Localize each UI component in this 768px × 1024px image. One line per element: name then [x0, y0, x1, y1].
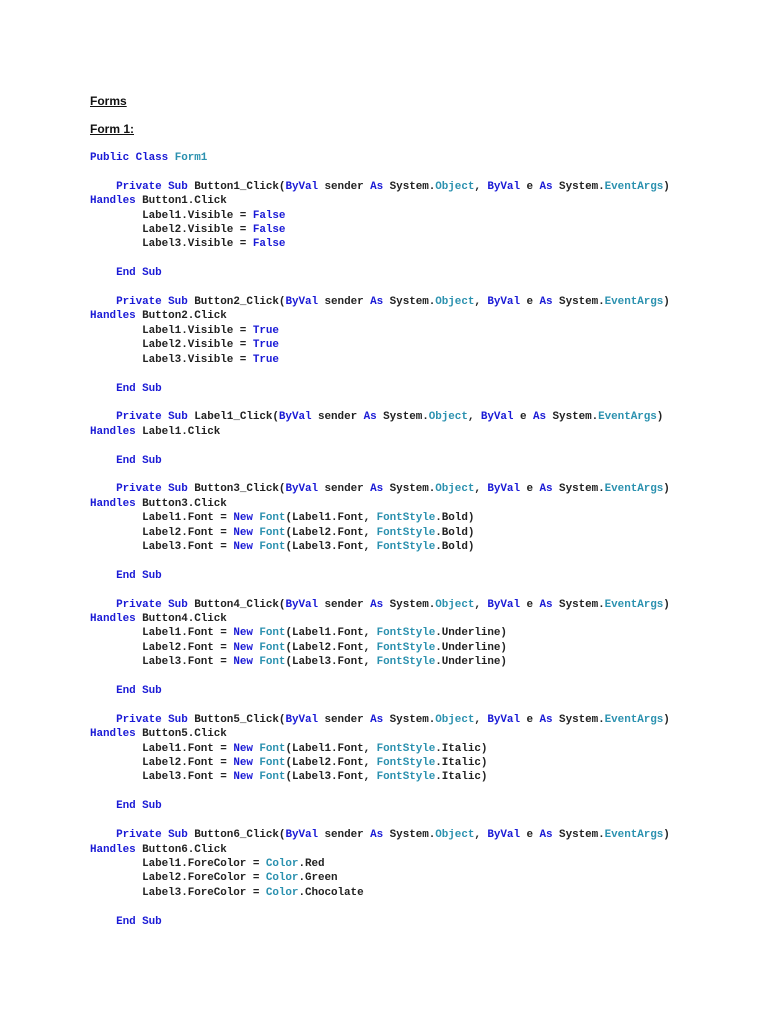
heading: Form 1: Form 1: [90, 122, 134, 136]
heading: Forms: Forms [90, 94, 127, 108]
code block: Public Class Form1 Private Sub Button1_Click(ByVal sender As System.Object, ByVal e As System.EventArgs) Handles Button1.Click Label1.Visible = False Label2.Visible = False Label3.Visible = False End Sub Private Sub Button2_Click(ByVal sender As System.Object, ByVal e As System.EventArgs) Handles Button2.Click Label1.Visible = True Label2.Visible = True Label3.Visible = True End Sub Private Sub Label1_Click(ByVal sender As System.Object, ByVal e As System.EventArgs) Handles Label1.Click End Sub Private Sub Button3_Click(ByVal sender As System.Object, ByVal e As System.EventArgs) Handles Button3.Click Label1.Font = New Font(Label1.Font, FontStyle.Bold) Label2.Font = New Font(Label2.Font, FontStyle.Bold) Label3.Font = New Font(Label3.Font, FontStyle.Bold) End Sub Private Sub Button4_Click(ByVal sender As System.Object, ByVal e As System.EventArgs) Handles Button4.Click Label1.Font = New Font(Label1.Font, FontStyle.Underline) Label2.Font = New Font(Label2.Font, FontStyle.Underline) Label3.Font = New Font(Label3.Font, FontStyle.Underline) End Sub Private Sub Button5_Click(ByVal sender As System.Object, ByVal e As System.EventArgs) Handles Button5.Click Label1.Font = New Font(Label1.Font, FontStyle.Italic) Label2.Font = New Font(Label2.Font, FontStyle.Italic) Label3.Font = New Font(Label3.Font, FontStyle.Italic) End Sub Private Sub Button6_Click(ByVal sender As System.Object, ByVal e As System.EventArgs) Handles Button6.Click Label1.ForeColor = Color.Red Label2.ForeColor = Color.Green Label3.ForeColor = Color.Chocolate End Sub [90, 152, 670, 928]
